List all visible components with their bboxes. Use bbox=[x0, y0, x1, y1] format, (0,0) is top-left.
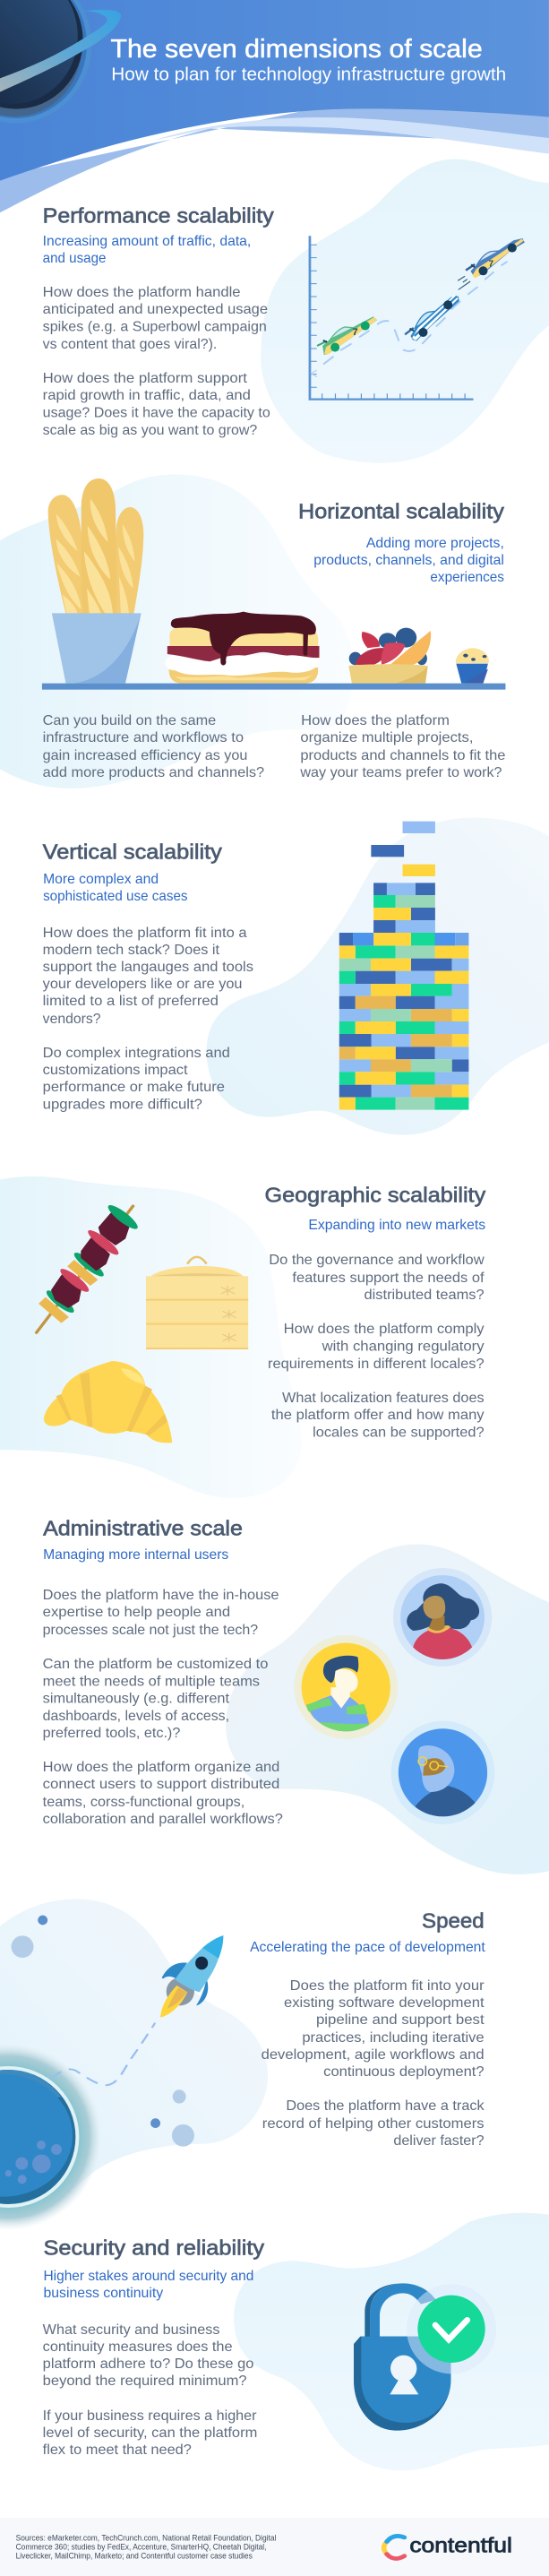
background blob bbox=[0, 1899, 268, 2207]
subheading: Accelerating the pace of development bbox=[250, 1939, 485, 1955]
text block: integrations: performance or make future bbox=[43, 1079, 225, 1095]
heading: Administrative scale bbox=[43, 1517, 243, 1540]
text block: localization: the platform offer and how many bbox=[271, 1407, 485, 1423]
sources note: Sources: eMarketer.com, TechCrunch.com, National Retail Foundation, Digital bbox=[16, 2534, 276, 2543]
subheading: and usage bbox=[43, 250, 106, 266]
heading: Performance scalability bbox=[43, 204, 274, 228]
text block: shared infrastructure bbox=[43, 712, 264, 780]
chart: brick tower bbox=[339, 822, 468, 1110]
subheading bbox=[313, 535, 504, 585]
text block: expertise: Does the platform have the in-house bbox=[43, 1587, 279, 1603]
text block: track record bbox=[262, 2098, 485, 2149]
text block: development pipeline bbox=[262, 1977, 485, 2080]
text block: customization: simultaneously (e.g. different bbox=[43, 1691, 229, 1706]
sources note bbox=[16, 2534, 276, 2561]
text block: continuity measures: What security and business bbox=[43, 2322, 219, 2338]
text block: organizing projects: organize multiple projects, bbox=[300, 729, 473, 745]
text block: rapid growth: usage? Does it have the capacity to bbox=[43, 405, 270, 420]
icon: baguettes in a vase bbox=[48, 478, 143, 684]
text block: localization: locales can be supported? bbox=[313, 1425, 485, 1440]
background blob bbox=[0, 1176, 301, 1498]
text block: regulation: with changing regulatory bbox=[322, 1339, 485, 1354]
icon: contentful logo bbox=[384, 2536, 404, 2559]
panel: performance scalability bbox=[43, 159, 549, 463]
text block: organizing projects bbox=[299, 712, 505, 780]
text block: tech stack: modern tech stack? Does it bbox=[43, 942, 219, 958]
chart: dashed growth path bbox=[324, 262, 507, 364]
text block: localization: What localization features does bbox=[282, 1390, 485, 1406]
text block: development pipeline: continuous deployment? bbox=[323, 2063, 485, 2080]
subheading: Increasing amount of traffic, data, bbox=[43, 233, 251, 249]
text block: continuity measures: beyond the required minimum? bbox=[43, 2373, 247, 2389]
logo wordmark: contentful bbox=[409, 2534, 512, 2557]
text block: usage spikes: anticipated and unexpected usage bbox=[43, 301, 268, 317]
text block: connecting users: collaboration and parallel workflows? bbox=[43, 1811, 283, 1827]
icon: floating dots bbox=[12, 1916, 194, 2147]
text block: continuity measures: continuity measures does the bbox=[43, 2339, 233, 2355]
text block: development pipeline: Does the platform fit into your bbox=[290, 1977, 485, 1994]
panel: administrative scale bbox=[43, 1517, 549, 1874]
heading: Horizontal scalability bbox=[298, 500, 504, 523]
icon: padlock with check bbox=[354, 2283, 496, 2431]
icon: planet bbox=[0, 2044, 101, 2230]
background blob bbox=[207, 818, 549, 1135]
text block: rapid growth: scale as big as you want to grow? bbox=[43, 422, 257, 438]
subheading: More complex and bbox=[43, 871, 159, 887]
panel: geographic scalability bbox=[0, 1176, 485, 1498]
background blob bbox=[261, 159, 549, 463]
subheading bbox=[43, 871, 188, 904]
text block: governance: distributed teams? bbox=[365, 1287, 485, 1303]
text block: rapid growth: How does the platform support bbox=[43, 370, 247, 386]
text block: development pipeline: existing software development bbox=[284, 1994, 485, 2011]
text block: track record: deliver faster? bbox=[393, 2132, 485, 2149]
panel: header bbox=[0, 0, 549, 212]
chart: growth axes bbox=[310, 236, 473, 400]
text block: connecting users bbox=[43, 1759, 283, 1827]
text block: governance: Do the governance and workflow bbox=[269, 1252, 485, 1268]
text block: development pipeline: practices, including iterative bbox=[302, 2029, 485, 2046]
text block: tech stack: How does the platform fit into a bbox=[43, 925, 247, 941]
text block: rapid growth: rapid growth in traffic, data, and bbox=[43, 387, 251, 403]
text block: usage spikes: spikes (e.g. a Superbowl campaign bbox=[43, 319, 267, 334]
subheading: Expanding into new markets bbox=[308, 1217, 485, 1233]
shelf bbox=[42, 684, 505, 690]
subheading: sophisticated use cases bbox=[43, 888, 188, 904]
text block: shared infrastructure: add more products and channels? bbox=[43, 764, 264, 780]
text block: customization: dashboards, levels of access, bbox=[43, 1708, 229, 1724]
subheading: experiences bbox=[430, 569, 504, 585]
text block: regulation: How does the platform comply bbox=[284, 1321, 485, 1337]
text block: expertise: processes scale not just the tech? bbox=[43, 1622, 258, 1638]
text block: customization: Can the platform be customized to bbox=[43, 1656, 268, 1672]
icon: kebab skewer bbox=[37, 1202, 141, 1332]
icon: blue race car bbox=[405, 295, 459, 341]
text block: customization: preferred tools, etc.)? bbox=[43, 1725, 180, 1741]
heading: Geographic scalability bbox=[265, 1184, 485, 1207]
icon: yellow race car bbox=[466, 238, 525, 279]
text block: tech stack: vendors? bbox=[43, 1011, 101, 1027]
text block: regulation: requirements in different locales? bbox=[268, 1356, 485, 1372]
text block: connecting users: connect users to support distributed bbox=[43, 1776, 279, 1792]
text block: connecting users: How does the platform organize and bbox=[43, 1759, 279, 1775]
sources note: Commerce 360; studies by FedEx, Accenture, SmarterHQ, Cheetah Digital, bbox=[16, 2543, 266, 2552]
icon: ringed planet bbox=[0, 0, 121, 123]
subheading bbox=[43, 233, 251, 266]
text block: shared infrastructure: infrastructure and workflows to bbox=[43, 729, 244, 745]
icon: rocket bbox=[160, 1935, 223, 2018]
text block: customization: meet the needs of multiple teams bbox=[43, 1674, 260, 1689]
text block: expertise: expertise to help people and bbox=[43, 1604, 230, 1620]
text block: higher security: If your business requires a higher bbox=[43, 2408, 257, 2424]
text block: organizing projects: way your teams prefer to work? bbox=[299, 764, 502, 780]
background blob bbox=[234, 2213, 549, 2470]
icon: older man avatar bbox=[391, 1721, 494, 1824]
text block: track record: Does the platform have a track bbox=[286, 2098, 485, 2114]
text block: shared infrastructure: Can you build on the same bbox=[43, 712, 216, 728]
icon: blueberry muffin bbox=[456, 648, 489, 684]
background blob bbox=[0, 474, 354, 788]
text block: continuity measures bbox=[43, 2322, 253, 2389]
background blob bbox=[226, 1544, 549, 1874]
icon: green race car: 7 bbox=[352, 327, 358, 338]
text block: usage spikes bbox=[43, 284, 268, 352]
icon: bamboo steamer bbox=[146, 1257, 248, 1349]
text block: integrations: customizations impact bbox=[43, 1062, 188, 1078]
header wave: light layer bbox=[154, 117, 549, 154]
text block: higher security: level of security, can the platform bbox=[43, 2425, 257, 2441]
text block: regulation bbox=[268, 1321, 485, 1372]
text block: continuity measures: platform adhere to? Do these go bbox=[43, 2356, 253, 2372]
text block: higher security bbox=[43, 2408, 257, 2458]
text block: usage spikes: vs content that goes viral?). bbox=[43, 336, 217, 352]
text block: development pipeline: pipeline and support best bbox=[316, 2012, 485, 2028]
panel: security and reliability bbox=[0, 2213, 549, 2576]
subheading bbox=[43, 2268, 253, 2301]
text block: rapid growth bbox=[43, 370, 270, 438]
subheading: Managing more internal users bbox=[43, 1546, 228, 1563]
subheading: Adding more projects, bbox=[366, 535, 504, 551]
icon: croissant bbox=[44, 1361, 172, 1443]
panel: vertical scalability bbox=[43, 818, 549, 1135]
title: The seven dimensions of scale bbox=[111, 34, 483, 63]
sources note: Liveclicker, MailChimp, Marketo; and Contentful customer case studies bbox=[16, 2552, 253, 2561]
text block: tech stack: your developers like or are you bbox=[43, 976, 243, 992]
text block: localization bbox=[271, 1390, 485, 1440]
icon: green race car bbox=[317, 316, 377, 355]
text block: connecting users: teams, corss-functional groups, bbox=[43, 1794, 244, 1810]
heading: Speed bbox=[422, 1909, 485, 1933]
panel: horizontal scalability bbox=[0, 474, 505, 788]
subheading: products, channels, and digital bbox=[313, 552, 504, 568]
icon: cream cake bbox=[165, 612, 320, 684]
subheading: business continuity bbox=[43, 2285, 164, 2301]
icon: man avatar bbox=[294, 1635, 398, 1739]
text block: development pipeline: development, agile workflows and bbox=[262, 2046, 485, 2063]
text block: customization bbox=[43, 1656, 268, 1741]
text block: shared infrastructure: gain increased efficiency as you bbox=[43, 747, 247, 763]
subheading: Higher stakes around security and bbox=[43, 2268, 253, 2284]
text block: track record: record of helping other customers bbox=[262, 2115, 485, 2132]
heading: Vertical scalability bbox=[43, 840, 222, 864]
footer band bbox=[0, 2518, 549, 2576]
header wave: mid layer bbox=[0, 105, 549, 212]
text block: governance: features support the needs of bbox=[292, 1270, 485, 1286]
text block: expertise bbox=[43, 1587, 279, 1638]
text block: higher security: flex to meet that need? bbox=[43, 2442, 192, 2458]
text block: organizing projects: products and channels to fit the bbox=[300, 747, 505, 763]
icon: fruit tart bbox=[348, 628, 431, 684]
text block: tech stack: support the langauges and tools bbox=[43, 959, 253, 975]
header background bbox=[0, 0, 549, 181]
icon: woman avatar bbox=[393, 1568, 492, 1667]
text block: tech stack: limited to a list of preferred bbox=[43, 993, 219, 1009]
text block: governance bbox=[269, 1252, 485, 1303]
arrow: dashed flight path bbox=[52, 2023, 155, 2085]
panel: speed bbox=[0, 1899, 485, 2230]
text block: organizing projects: How does the platform bbox=[301, 712, 450, 728]
text block: usage spikes: How does the platform handle bbox=[43, 284, 241, 300]
text block: integrations: upgrades more difficult? bbox=[43, 1097, 202, 1112]
text block: tech stack bbox=[43, 925, 253, 1027]
text block: integrations: Do complex integrations and bbox=[43, 1045, 230, 1061]
heading: Security and reliability bbox=[43, 2236, 264, 2260]
icon: motion lines bbox=[458, 276, 470, 289]
icon: yellow race car: 7 bbox=[488, 259, 493, 269]
text block: integrations bbox=[43, 1045, 230, 1112]
